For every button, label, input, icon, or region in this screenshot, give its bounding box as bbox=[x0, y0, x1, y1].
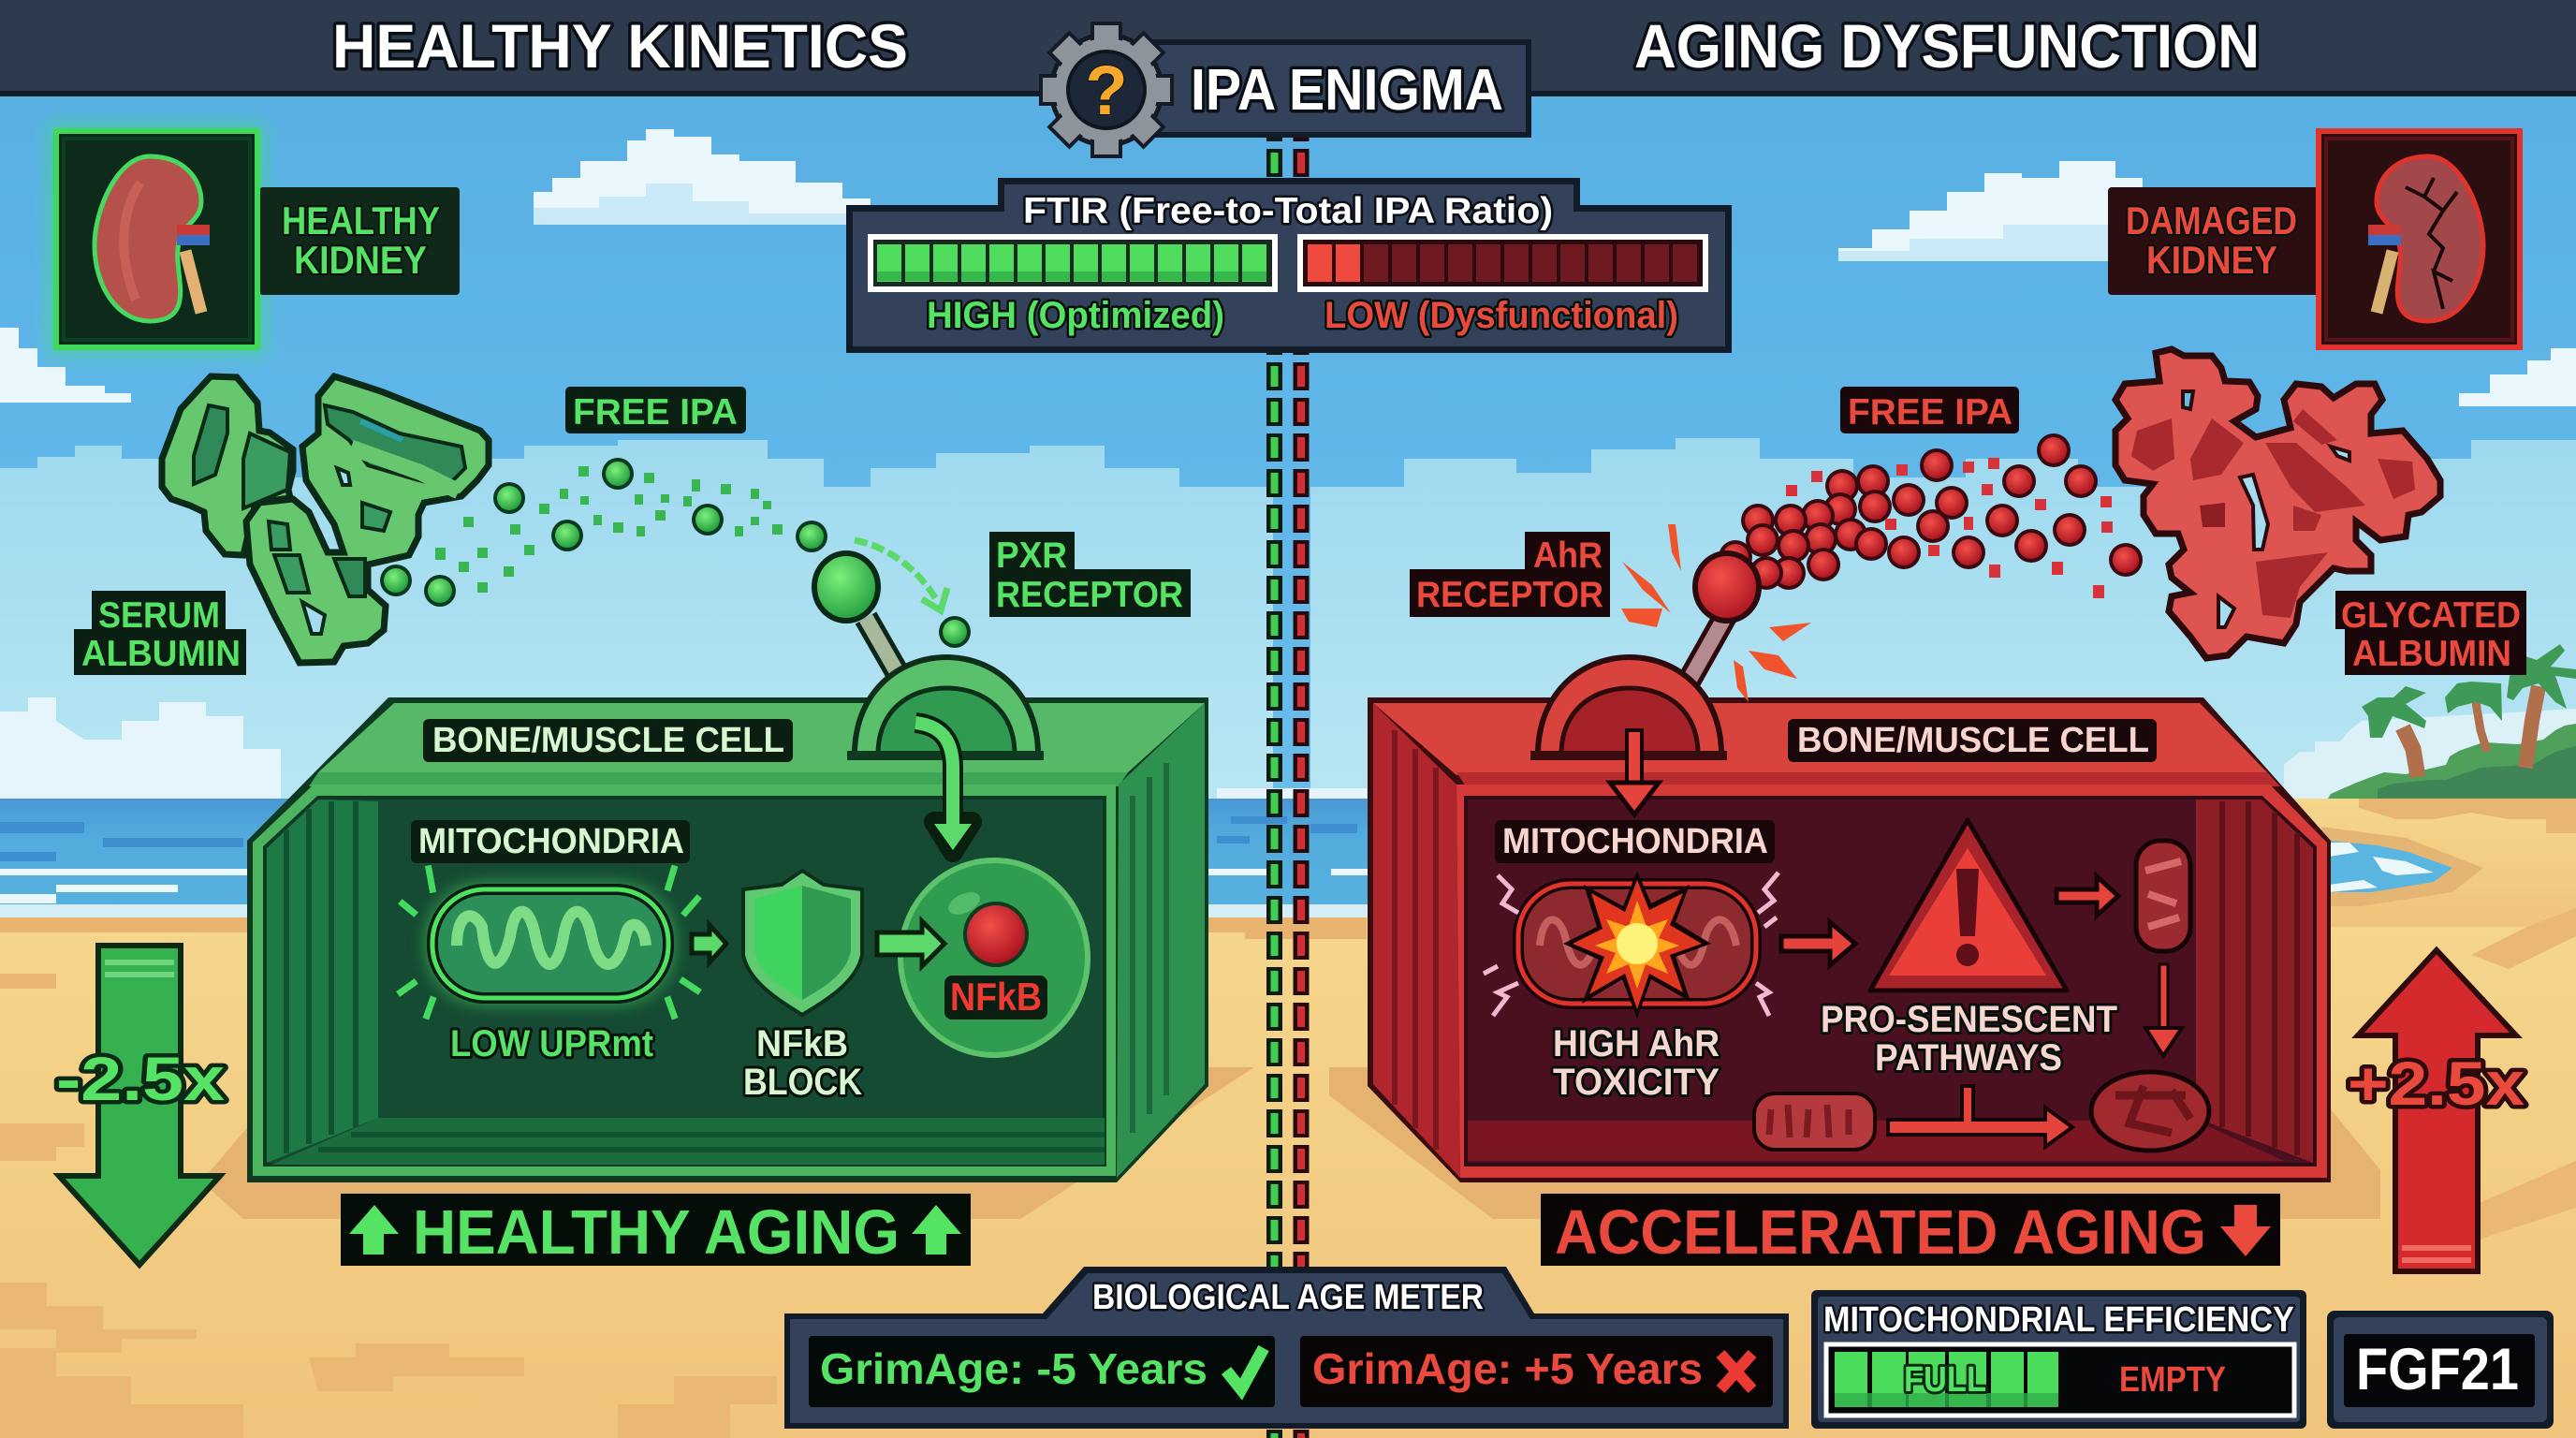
box top face bbox=[318, 703, 1205, 772]
arrow: receptor to nucleus bbox=[915, 723, 972, 852]
label: PXR receptor bbox=[989, 532, 1191, 617]
aging free IPA particles bbox=[1719, 433, 2143, 598]
box front frame bbox=[253, 785, 1116, 1176]
arrow: down to muscle bbox=[2145, 964, 2182, 1056]
meter title: BIOLOGICAL AGE METER bbox=[1092, 1278, 1484, 1317]
interior floor bbox=[271, 1118, 1105, 1165]
panel: FGF21 bbox=[2327, 1311, 2554, 1429]
label: healthy kidney: HEALTHY bbox=[282, 198, 440, 242]
arrow: pathway branch bbox=[1888, 1086, 2072, 1147]
illustration: glycated albumin protein bbox=[2115, 349, 2440, 658]
island bbox=[2328, 724, 2576, 799]
icon: nucleus cell bbox=[900, 860, 1088, 1055]
label: damaged kidney: DAMAGED bbox=[2126, 198, 2297, 242]
label: NFkB block: NFkB bbox=[756, 1023, 848, 1064]
panel: mitochondrial efficiency bbox=[1811, 1290, 2306, 1429]
panel: aging cell box bbox=[1368, 697, 2331, 1182]
icon: up arrow bbox=[912, 1205, 961, 1255]
label: healthy kidney bbox=[259, 187, 460, 295]
label: pro-senescent pathways bbox=[1821, 999, 2117, 1078]
box interior bbox=[265, 798, 1105, 1165]
panel: damaged kidney bbox=[2108, 131, 2520, 347]
panel: FGF21: FGF21 bbox=[2356, 1337, 2519, 1402]
label: glycated albumin bbox=[2335, 591, 2526, 675]
lever knob bbox=[814, 553, 878, 621]
box interior bbox=[1466, 798, 2315, 1165]
icon: gear with question mark bbox=[1041, 23, 1172, 156]
label: glycated albumin: ALBUMIN bbox=[2352, 634, 2511, 674]
panel: biological age meter bbox=[784, 1267, 1789, 1429]
icon: damaged mitochondrion horizontal bbox=[1754, 1093, 1875, 1150]
panel: healthy cell box bbox=[247, 697, 1208, 1182]
label: high AhR toxicity: HIGH AhR bbox=[1553, 1023, 1720, 1064]
box top face bbox=[1373, 703, 2270, 775]
label: pro-senescent pathways: PATHWAYS bbox=[1875, 1037, 2062, 1078]
label: bone/muscle cell: BONE/MUSCLE CELL bbox=[432, 721, 784, 760]
label: PXR receptor: PXR bbox=[996, 536, 1067, 576]
central dashed divider bbox=[1275, 113, 1301, 1438]
label: NFkB block bbox=[743, 1023, 862, 1103]
label: NFkB: NFkB bbox=[950, 975, 1042, 1019]
label: high AhR toxicity bbox=[1553, 1023, 1720, 1103]
low ratio bar bbox=[1300, 237, 1705, 289]
FTIR title: FTIR (Free-to-Total IPA Ratio) bbox=[1023, 191, 1553, 231]
icon: check bbox=[1226, 1348, 1264, 1389]
label: glycated albumin: GLYCATED bbox=[2341, 595, 2521, 636]
sand bbox=[0, 917, 2576, 1438]
interior left wall bbox=[267, 800, 378, 1163]
icon: down arrow bbox=[2220, 1205, 2271, 1256]
panel: healthy kidney bbox=[49, 124, 460, 355]
icon: damaged mitochondrion vertical bbox=[2136, 841, 2190, 951]
arrow: warning to mitochondrion bbox=[2056, 876, 2118, 916]
cloud upper right bbox=[1838, 161, 2153, 261]
arrow: shield to NFkB bbox=[877, 921, 944, 966]
efficiency bar: EMPTY bbox=[2119, 1360, 2226, 1400]
label: PXR receptor: RECEPTOR bbox=[996, 575, 1183, 615]
icon: warning triangle bbox=[1870, 820, 2067, 990]
lever knob bbox=[1695, 553, 1759, 621]
label: damaged kidney bbox=[2108, 187, 2320, 295]
high ratio bar bbox=[871, 237, 1275, 289]
label: serum albumin bbox=[74, 591, 246, 675]
label: low UPRmt: LOW UPRmt bbox=[450, 1023, 653, 1064]
value: minus 2.5x: -2.5x bbox=[56, 1044, 225, 1113]
box front frame bbox=[1456, 785, 2327, 1178]
banner: healthy aging: HEALTHY AGING bbox=[413, 1197, 900, 1268]
efficiency title: MITOCHONDRIAL EFFICIENCY bbox=[1823, 1300, 2294, 1340]
icon: shield bbox=[743, 871, 862, 1015]
label: pro-senescent pathways: PRO-SENESCENT bbox=[1821, 999, 2117, 1040]
cloud left edge bbox=[0, 328, 131, 403]
panel: FTIR gauge bbox=[846, 178, 1732, 353]
value: plus 2.5x: +2.5x bbox=[2348, 1049, 2525, 1118]
icon: cross bbox=[1720, 1354, 1752, 1389]
label: damaged kidney: KIDNEY bbox=[2146, 238, 2277, 282]
readout: plus 5 years bbox=[1300, 1336, 1773, 1407]
label: mitochondria: MITOCHONDRIA bbox=[418, 822, 684, 861]
title: healthy kinetics: HEALTHY KINETICS bbox=[332, 11, 908, 81]
label: serum albumin: SERUM bbox=[98, 595, 220, 636]
lagoon bbox=[2321, 827, 2483, 906]
label: serum albumin: ALBUMIN bbox=[81, 634, 241, 674]
distant cloud band bbox=[0, 438, 2576, 805]
high label: HIGH (Optimized) bbox=[927, 295, 1224, 336]
sparks bbox=[1621, 524, 1811, 702]
readout: plus 5 years: GrimAge: +5 Years bbox=[1312, 1344, 1703, 1393]
header bar bbox=[0, 0, 2576, 96]
box left side bbox=[1373, 703, 1460, 1178]
label: AhR receptor: RECEPTOR bbox=[1416, 575, 1603, 615]
icon: healthy kidney bbox=[95, 156, 210, 321]
AhR lever switch bbox=[1530, 524, 1811, 814]
icon: up arrow bbox=[349, 1205, 399, 1255]
box right side bbox=[1117, 703, 1205, 1178]
label: mitochondria: MITOCHONDRIA bbox=[1502, 822, 1768, 861]
arrow: mitochondria to shield bbox=[692, 925, 726, 962]
arrow: mitochondria to warning bbox=[1781, 922, 1855, 965]
banner: accelerated aging: ACCELERATED AGING bbox=[1555, 1197, 2206, 1268]
label: bone/muscle cell: BONE/MUSCLE CELL bbox=[1797, 721, 2149, 760]
label: NFkB block: BLOCK bbox=[743, 1062, 862, 1103]
healthy free IPA particles bbox=[380, 458, 971, 648]
efficiency bar bbox=[1826, 1344, 2294, 1416]
label: healthy kidney: KIDNEY bbox=[294, 238, 427, 282]
panel: IPA Enigma bbox=[1041, 23, 1531, 156]
big red up arrow bbox=[2348, 950, 2525, 1271]
panel: IPA Enigma: IPA ENIGMA bbox=[1191, 58, 1503, 123]
low label: LOW (Dysfunctional) bbox=[1325, 295, 1678, 336]
icon: damaged mitochondrion round bbox=[2091, 1072, 2209, 1151]
PXR lever switch bbox=[814, 540, 1044, 852]
readout: minus 5 years: GrimAge: -5 Years bbox=[820, 1344, 1208, 1393]
arrow: receptor to mitochondria bbox=[1610, 730, 1659, 814]
cloud upper left bbox=[534, 129, 871, 225]
efficiency bar: FULL bbox=[1904, 1360, 1986, 1400]
horizon clouds bbox=[0, 697, 281, 805]
icon: gear with question mark: ? bbox=[1085, 51, 1128, 129]
interior floor bbox=[1468, 1121, 2284, 1161]
label: AhR receptor: AhR bbox=[1533, 536, 1603, 576]
arrow: IPA into receptor bbox=[855, 540, 947, 610]
interior right wall bbox=[2196, 800, 2313, 1163]
label: healthy free IPA: FREE IPA bbox=[573, 392, 738, 433]
icon: cracked kidney bbox=[2368, 156, 2483, 321]
label: aging free IPA: FREE IPA bbox=[1848, 392, 2012, 433]
big green down arrow bbox=[56, 946, 225, 1265]
cloud right edge bbox=[2459, 348, 2576, 406]
icon: exploding mitochondrion bbox=[1484, 871, 1778, 1019]
sea bbox=[0, 799, 2576, 922]
title: aging dysfunction: AGING DYSFUNCTION bbox=[1634, 11, 2260, 81]
palm trees bbox=[2403, 686, 2539, 777]
icon: glowing mitochondrion bbox=[401, 869, 697, 1016]
box shadows bbox=[201, 1067, 1254, 1219]
illustration: serum albumin protein bbox=[162, 376, 489, 663]
readout: minus 5 years bbox=[809, 1336, 1275, 1407]
label: high AhR toxicity: TOXICITY bbox=[1553, 1062, 1720, 1103]
label: AhR receptor bbox=[1410, 532, 1610, 617]
